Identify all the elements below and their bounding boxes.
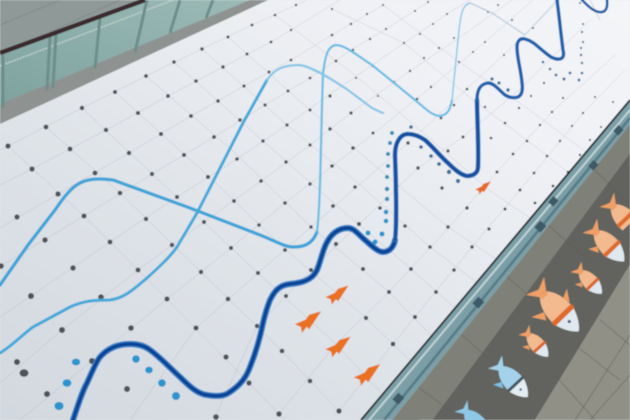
panel: grey walkway: [392, 124, 630, 420]
icon: orange fish 4: [354, 364, 380, 386]
icon: orange fish 2: [295, 311, 321, 333]
icon: blue fish cut off bottom: [454, 400, 487, 420]
icon: orange fish lower: [515, 325, 554, 365]
icon: orange fish 1: [325, 286, 349, 304]
icon: blue fish: [483, 355, 535, 409]
panel: glass balustrade and upper level: [0, 0, 268, 124]
icon: small orange fish: [475, 182, 491, 194]
icon: orange fish middle right: [567, 261, 608, 303]
icon: orange fish 3: [325, 337, 351, 357]
panel: teal rail along floor edge: [361, 100, 630, 420]
icon: orange fish cut off right: [599, 193, 630, 231]
icon: big orange fish: [518, 271, 594, 348]
icon: orange fish top right: [578, 219, 630, 273]
